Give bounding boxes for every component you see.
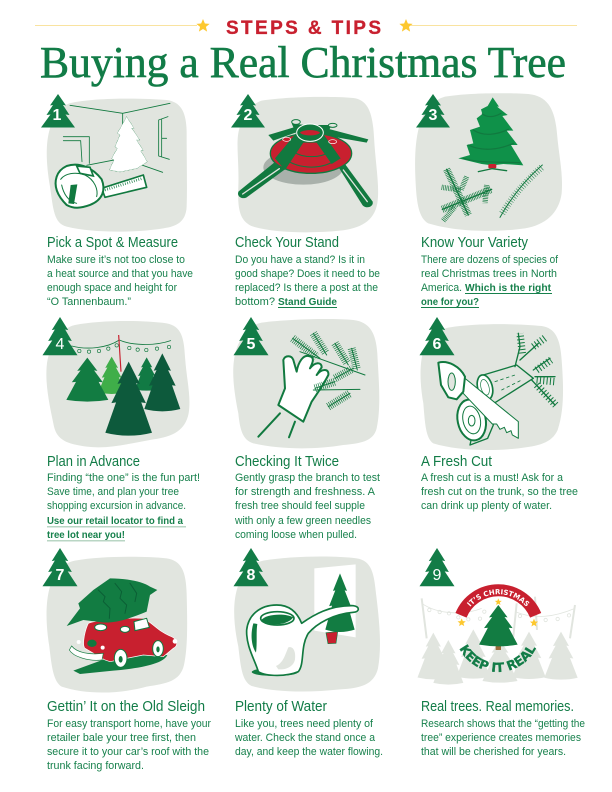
panel background [47,557,187,693]
body text: Use our retail locator to find a [47,516,183,527]
panel background [233,319,379,448]
panel: step 7 [42,548,211,772]
body text: bottom? [235,296,275,308]
body text: Stand Guide [278,297,337,308]
number badge 5: 5 [247,336,256,353]
body text [47,718,211,772]
header [35,18,577,87]
body text: A fresh cut is a must! Ask for a [421,472,563,484]
body text: a heat source and that you have [47,268,193,280]
body text: Make sure it’s not too close to [47,254,185,266]
panel: step 5 [233,317,380,541]
panel background [234,557,380,692]
illustration: room and tape measure [56,103,170,208]
number badge 6 [419,317,455,355]
body text [47,254,193,308]
number badge 8: 8 [247,567,256,584]
panel: step 6 [419,317,578,512]
body text: fresh tree should feel supple [235,500,365,512]
body text: trunk facing forward. [47,760,144,772]
body text: real Christmas trees in North [421,268,557,280]
body text: shopping excursion in advance. [47,500,186,512]
body text [421,472,578,512]
background trees and lights [417,597,578,685]
body text: day, and keep the water flowing. [235,746,383,758]
number badge 1: 1 [53,107,62,124]
body text: retailer bale your tree first, then [47,732,196,744]
number badge 2 [231,94,265,128]
icon: star left [196,19,210,32]
body text: tree lot near you! [47,530,125,541]
heading: Know Your Variety [421,235,529,251]
red banner [461,590,536,615]
body text: Research shows that the “getting the [421,718,585,730]
heading: Plenty of Water [235,699,327,715]
heading: Real trees. Real memories. [421,699,574,715]
body text: one for you? [421,297,479,308]
number badge 9 [419,548,455,586]
body text: Do you have a stand? Is it in [235,254,365,266]
banner text: IT’S CHRISTMAS [466,589,530,606]
header rule left [35,25,197,26]
body text [47,472,200,542]
body text: enough space and height for [47,282,177,294]
number badge 2: 2 [244,107,253,124]
body text: For easy transport home, have your [47,718,211,730]
heading: Checking It Twice [235,454,339,470]
body text: America. [421,282,462,294]
body text: replaced? Is there a post at the [235,282,378,294]
illustration: tree stand [238,120,373,207]
illustration: Keep It Real logo [418,584,578,684]
illustration: tree and branches [442,97,542,221]
number badge 3 [416,94,450,128]
heading: Gettin’ It on the Old Sleigh [47,699,205,715]
panel background [46,321,189,447]
number badge 4: 4 [56,336,65,353]
title: Buying a Real Christmas Tree [40,38,566,87]
panel background [421,324,563,450]
heading: Pick a Spot & Measure [47,235,178,251]
number badge 6: 6 [433,336,442,353]
keep it real text: KEEP IT REAL [460,644,536,672]
body text: can drink up plenty of water. [421,500,552,512]
illustration: watering can and tree [247,564,358,676]
body text: coming loose when pulled. [235,529,357,541]
number badge 7: 7 [56,567,65,584]
number badge 3: 3 [429,107,438,124]
header rule right [411,25,577,26]
illustration: saw and cut trunk [438,333,556,445]
panel background [415,93,562,231]
heading: Plan in Advance [47,454,140,470]
body text [234,718,383,758]
body text: water. Check the stand once a [234,732,375,744]
body text: “O Tannenbaum.” [47,296,131,308]
body text: that will be cherished for years. [421,746,566,758]
panel background [238,97,378,232]
body text: with only a few green needles [234,515,371,527]
illustration: gloved hand and branch [258,333,365,437]
body text: tree” experience creates memories [421,732,581,744]
illustration: tree lot [66,335,180,436]
panel: step 8 [233,548,383,758]
body text [421,718,585,758]
body text: for strength and freshness. A [235,486,376,498]
number badge 1 [41,94,75,128]
body text: Save time, and plan your tree [47,486,179,498]
body text: good shape? Does it need to be [235,268,380,280]
heading: A Fresh Cut [421,454,492,470]
body text: secure it to your car’s roof with the [47,746,209,758]
body text [234,472,380,541]
panel background [47,99,187,232]
panel: step 2 [231,94,380,308]
number badge 9: 9 [433,567,442,584]
body text: Like you, trees need plenty of [235,718,373,730]
logo stars [458,598,538,627]
body text [421,254,558,308]
number badge 7 [42,548,78,586]
body text: fresh cut on the trunk, so the tree [421,486,578,498]
panel: step 4 [42,317,200,542]
illustration: car with tree [67,578,177,674]
panel: step 9 [418,548,585,758]
body text: Finding “the one” is the fun part! [47,472,200,484]
body text [235,254,380,308]
body text: Which is the right [465,283,552,294]
panel: step 3 [415,93,562,308]
number badge 4 [42,317,78,355]
body text: Gently grasp the branch to test [235,472,380,484]
heading: Check Your Stand [235,235,339,251]
panel: step 1 [41,94,193,308]
icon: star right [399,19,413,32]
number badge 8 [233,548,269,586]
number badge 5 [233,317,269,355]
body text: There are dozens of species of [421,254,558,266]
logo tree [479,605,518,650]
kicker: STEPS & TIPS [226,18,381,39]
